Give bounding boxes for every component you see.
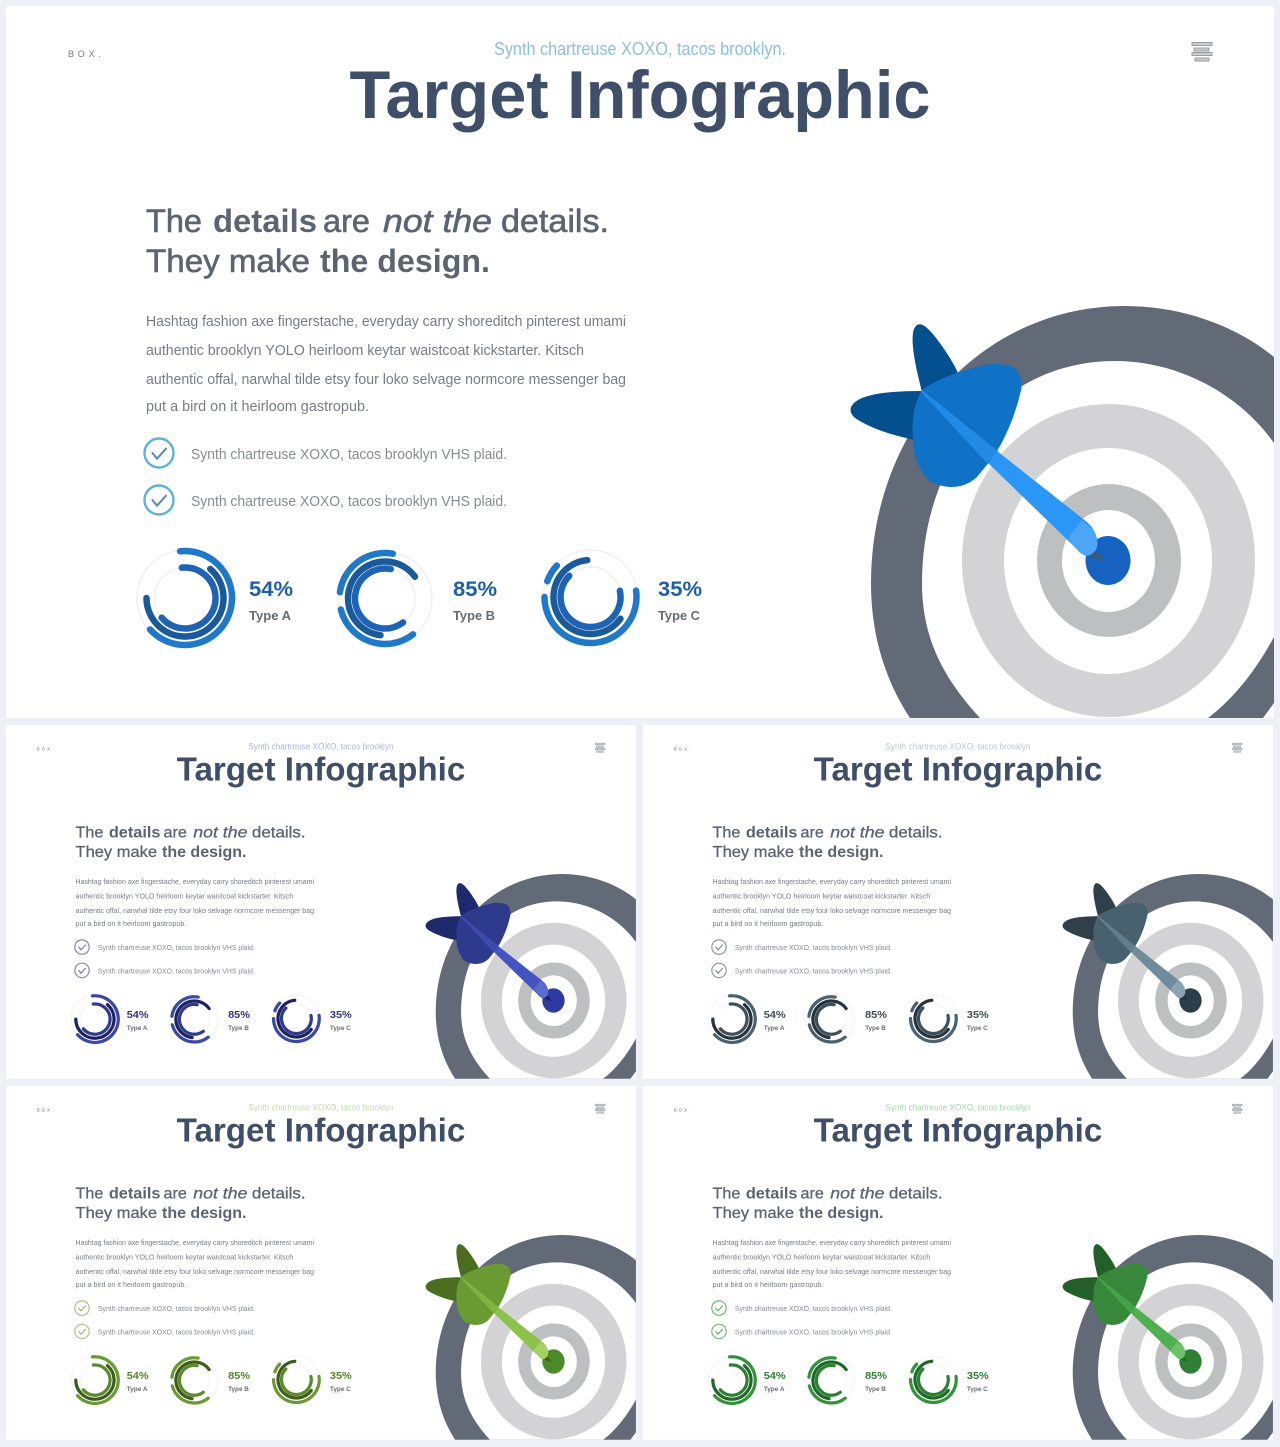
body text: Hashtag fashion axe fingerstache, everyday carry shoreditch pinterest umami	[713, 877, 951, 886]
stat: type B: 85%	[865, 1371, 887, 1382]
target	[1073, 1235, 1273, 1440]
body text	[146, 314, 626, 415]
heading: details	[109, 824, 161, 841]
stat: type B: Type B	[228, 1386, 249, 1393]
heading: not the	[383, 203, 492, 239]
ring chart: type B	[163, 1349, 226, 1412]
heading: They make	[76, 1205, 157, 1222]
heading: details.	[252, 1185, 306, 1202]
subtitle: Synth chartreuse XOXO, tacos brooklyn	[248, 741, 394, 751]
title: Target Infographic	[177, 1112, 465, 1150]
target	[436, 1235, 636, 1440]
body text: put a bird on it heirloom gastropub.	[713, 1280, 823, 1289]
heading: details.	[889, 1185, 943, 1202]
title: Target Infographic	[814, 1112, 1102, 1150]
body text: put a bird on it heirloom gastropub.	[713, 919, 823, 928]
heading: the design.	[162, 1205, 246, 1222]
brand label: BOX.	[674, 746, 692, 751]
ring chart: type B	[163, 988, 226, 1051]
subtitle: Synth chartreuse XOXO, tacos brooklyn	[885, 741, 1031, 751]
stat: type A	[127, 1010, 149, 1032]
stat: type B	[453, 578, 497, 623]
heading	[76, 1185, 306, 1222]
stat: type C: Type C	[330, 1025, 351, 1032]
stat: type A: 54%	[764, 1371, 786, 1382]
body text: authentic offal, narwhal tilde etsy four loko selvage normcore messenger bag	[713, 906, 951, 915]
heading: The	[76, 1185, 104, 1202]
body text	[713, 877, 951, 928]
brand label: BOX.	[68, 49, 105, 59]
checklist item 1: Synth chartreuse XOXO, tacos brooklyn VHS plaid.	[735, 1304, 892, 1313]
heading: details	[746, 824, 798, 841]
heading	[713, 824, 943, 861]
ring chart: type B	[800, 988, 863, 1051]
stat: type C	[967, 1010, 989, 1032]
body text: authentic brooklyn YOLO heirloom keytar waistcoat kickstarter. Kitsch	[713, 891, 930, 900]
icon: menu	[1232, 743, 1242, 752]
checklist item 2	[144, 486, 507, 514]
bullseye	[542, 1349, 565, 1374]
stat: type A	[249, 578, 293, 623]
body text: authentic brooklyn YOLO heirloom keytar waistcoat kickstarter. Kitsch	[146, 343, 584, 359]
body text: authentic offal, narwhal tilde etsy four loko selvage normcore messenger bag	[713, 1267, 951, 1276]
heading: the design.	[320, 243, 490, 279]
stat: type B	[228, 1371, 250, 1393]
ring chart: type C	[267, 1350, 326, 1409]
bullseye	[1179, 988, 1202, 1013]
stat: type A: Type A	[764, 1386, 785, 1393]
stat: type B	[865, 1371, 887, 1393]
icon: dart	[426, 1244, 552, 1362]
heading: the design.	[799, 844, 883, 861]
checklist item 2: Synth chartreuse XOXO, tacos brooklyn VHS plaid.	[735, 966, 892, 975]
target	[871, 306, 1274, 718]
bullseye	[1179, 1349, 1202, 1374]
body text: Hashtag fashion axe fingerstache, everyday carry shoreditch pinterest umami	[76, 877, 314, 886]
heading: details.	[889, 824, 943, 841]
body text: authentic brooklyn YOLO heirloom keytar waistcoat kickstarter. Kitsch	[76, 1252, 293, 1261]
target	[1073, 874, 1273, 1079]
checklist item 2	[712, 1324, 892, 1339]
stat: type B: Type B	[865, 1386, 886, 1393]
stat: type B: Type B	[865, 1025, 886, 1032]
icon: dart	[850, 324, 1105, 562]
stat: type C: Type C	[967, 1025, 988, 1032]
stat: type C: 35%	[658, 578, 702, 601]
checklist item 2: Synth chartreuse XOXO, tacos brooklyn VHS plaid.	[98, 1327, 255, 1336]
stat: type B: 85%	[228, 1010, 250, 1021]
body text	[76, 1238, 314, 1289]
heading	[146, 203, 609, 279]
ring chart: type C	[267, 989, 326, 1048]
body text: authentic offal, narwhal tilde etsy four loko selvage normcore messenger bag	[76, 1267, 314, 1276]
checklist item 1	[75, 940, 255, 954]
brand label: BOX.	[674, 1107, 692, 1112]
subtitle: Synth chartreuse XOXO, tacos brooklyn	[248, 1102, 394, 1112]
stat: type A	[764, 1010, 786, 1032]
stat: type C: Type C	[330, 1386, 351, 1393]
heading: the design.	[799, 1205, 883, 1222]
heading	[76, 824, 306, 861]
body text: Hashtag fashion axe fingerstache, everyday carry shoreditch pinterest umami	[76, 1238, 314, 1247]
heading: are	[323, 203, 370, 239]
icon: dart	[1063, 1244, 1189, 1362]
title: Target Infographic	[177, 751, 465, 789]
body text	[713, 1238, 951, 1289]
ring chart: type A	[131, 544, 239, 652]
ring chart: type B	[321, 535, 449, 662]
stat: type C: Type C	[658, 608, 701, 623]
heading: are	[800, 1185, 824, 1202]
panel: slate slide	[643, 725, 1273, 1079]
stat: type B: 85%	[865, 1010, 887, 1021]
heading: They make	[713, 844, 794, 861]
heading: not the	[830, 1185, 885, 1202]
subtitle: Synth chartreuse XOXO, tacos brooklyn	[885, 1102, 1031, 1112]
panel: main blue slide	[6, 6, 1274, 718]
heading: are	[800, 824, 824, 841]
panel: olive slide	[6, 1086, 636, 1440]
heading: are	[163, 1185, 187, 1202]
stat: type C: Type C	[967, 1386, 988, 1393]
checklist item 2	[75, 963, 255, 978]
body text: authentic offal, narwhal tilde etsy four loko selvage normcore messenger bag	[76, 906, 314, 915]
panel: indigo slide	[6, 725, 636, 1079]
checklist item 1	[75, 1301, 255, 1315]
heading: details	[213, 203, 317, 239]
heading: details	[746, 1185, 798, 1202]
ring chart: type C	[904, 1350, 963, 1409]
stat: type C: 35%	[330, 1010, 352, 1021]
stat: type B: Type B	[228, 1025, 249, 1032]
heading: are	[163, 824, 187, 841]
stat: type A	[127, 1371, 149, 1393]
stat: type C	[330, 1010, 352, 1032]
ring chart: type A	[68, 992, 122, 1046]
checklist item 1	[144, 438, 507, 468]
stat: type A: Type A	[764, 1025, 785, 1032]
checklist item 1	[712, 1301, 892, 1315]
icon: menu	[1232, 1104, 1242, 1113]
heading	[713, 1185, 943, 1222]
title: Target Infographic	[814, 751, 1102, 789]
icon: dart	[426, 883, 552, 1001]
stat: type C: 35%	[967, 1010, 989, 1021]
bullseye	[542, 988, 565, 1013]
heading: not the	[193, 1185, 248, 1202]
heading: not the	[830, 824, 885, 841]
bullseye	[1086, 536, 1130, 585]
heading: The	[146, 203, 202, 239]
heading: The	[713, 824, 741, 841]
ring chart: type C	[904, 989, 963, 1048]
stat: type A: 54%	[127, 1371, 149, 1382]
ring chart: type A	[705, 1353, 759, 1407]
stat: type A: 54%	[249, 578, 293, 601]
stat: type C: 35%	[967, 1371, 989, 1382]
body text: put a bird on it heirloom gastropub.	[76, 1280, 186, 1289]
body text: authentic brooklyn YOLO heirloom keytar waistcoat kickstarter. Kitsch	[76, 891, 293, 900]
checklist item 1: Synth chartreuse XOXO, tacos brooklyn VHS plaid.	[98, 943, 255, 952]
checklist item 1: Synth chartreuse XOXO, tacos brooklyn VHS plaid.	[735, 943, 892, 952]
checklist item 1: Synth chartreuse XOXO, tacos brooklyn VHS plaid.	[191, 447, 507, 463]
stat: type C	[330, 1371, 352, 1393]
body text: authentic brooklyn YOLO heirloom keytar waistcoat kickstarter. Kitsch	[713, 1252, 930, 1261]
stat: type B: Type B	[453, 608, 495, 623]
stat: type A: Type A	[127, 1025, 148, 1032]
heading: details.	[252, 824, 306, 841]
ring chart: type C	[532, 538, 649, 656]
icon: menu	[1192, 42, 1212, 61]
stat: type A	[764, 1371, 786, 1393]
ring chart: type A	[705, 992, 759, 1046]
icon: menu	[595, 1104, 605, 1113]
ring chart: type A	[68, 1353, 122, 1407]
title: Target Infographic	[350, 57, 930, 133]
checklist item 1	[712, 940, 892, 954]
icon: dart	[1063, 883, 1189, 1001]
heading: They make	[146, 243, 310, 279]
ring chart: type B	[800, 1349, 863, 1412]
body text	[76, 877, 314, 928]
icon: menu	[595, 743, 605, 752]
stat: type A: Type A	[127, 1386, 148, 1393]
heading: They make	[76, 844, 157, 861]
brand label: BOX.	[37, 1107, 55, 1112]
checklist item 2	[75, 1324, 255, 1339]
heading: The	[713, 1185, 741, 1202]
stat: type B	[228, 1010, 250, 1032]
target	[436, 874, 636, 1079]
stat: type C: 35%	[330, 1371, 352, 1382]
brand label: BOX.	[37, 746, 55, 751]
stat: type C	[967, 1371, 989, 1393]
checklist item 1: Synth chartreuse XOXO, tacos brooklyn VHS plaid.	[98, 1304, 255, 1313]
stat: type A: 54%	[764, 1010, 786, 1021]
body text: put a bird on it heirloom gastropub.	[76, 919, 186, 928]
heading: details.	[501, 203, 609, 239]
stat: type B: 85%	[453, 578, 497, 601]
stat: type B	[865, 1010, 887, 1032]
heading: They make	[713, 1205, 794, 1222]
subtitle: Synth chartreuse XOXO, tacos brooklyn.	[494, 39, 786, 59]
heading: not the	[193, 824, 248, 841]
stat: type A: Type A	[249, 608, 292, 623]
checklist item 2	[712, 963, 892, 978]
body text: Hashtag fashion axe fingerstache, everyday carry shoreditch pinterest umami	[713, 1238, 951, 1247]
heading: details	[109, 1185, 161, 1202]
body text: put a bird on it heirloom gastropub.	[146, 399, 369, 415]
panel: green slide	[643, 1086, 1273, 1440]
checklist item 2: Synth chartreuse XOXO, tacos brooklyn VHS plaid.	[735, 1327, 892, 1336]
body text: Hashtag fashion axe fingerstache, everyday carry shoreditch pinterest umami	[146, 314, 626, 330]
heading: the design.	[162, 844, 246, 861]
checklist item 2: Synth chartreuse XOXO, tacos brooklyn VHS plaid.	[98, 966, 255, 975]
stat: type C	[658, 578, 702, 623]
heading: The	[76, 824, 104, 841]
stat: type B: 85%	[228, 1371, 250, 1382]
stat: type A: 54%	[127, 1010, 149, 1021]
body text: authentic offal, narwhal tilde etsy four loko selvage normcore messenger bag	[146, 372, 626, 388]
checklist item 2: Synth chartreuse XOXO, tacos brooklyn VHS plaid.	[191, 494, 507, 510]
